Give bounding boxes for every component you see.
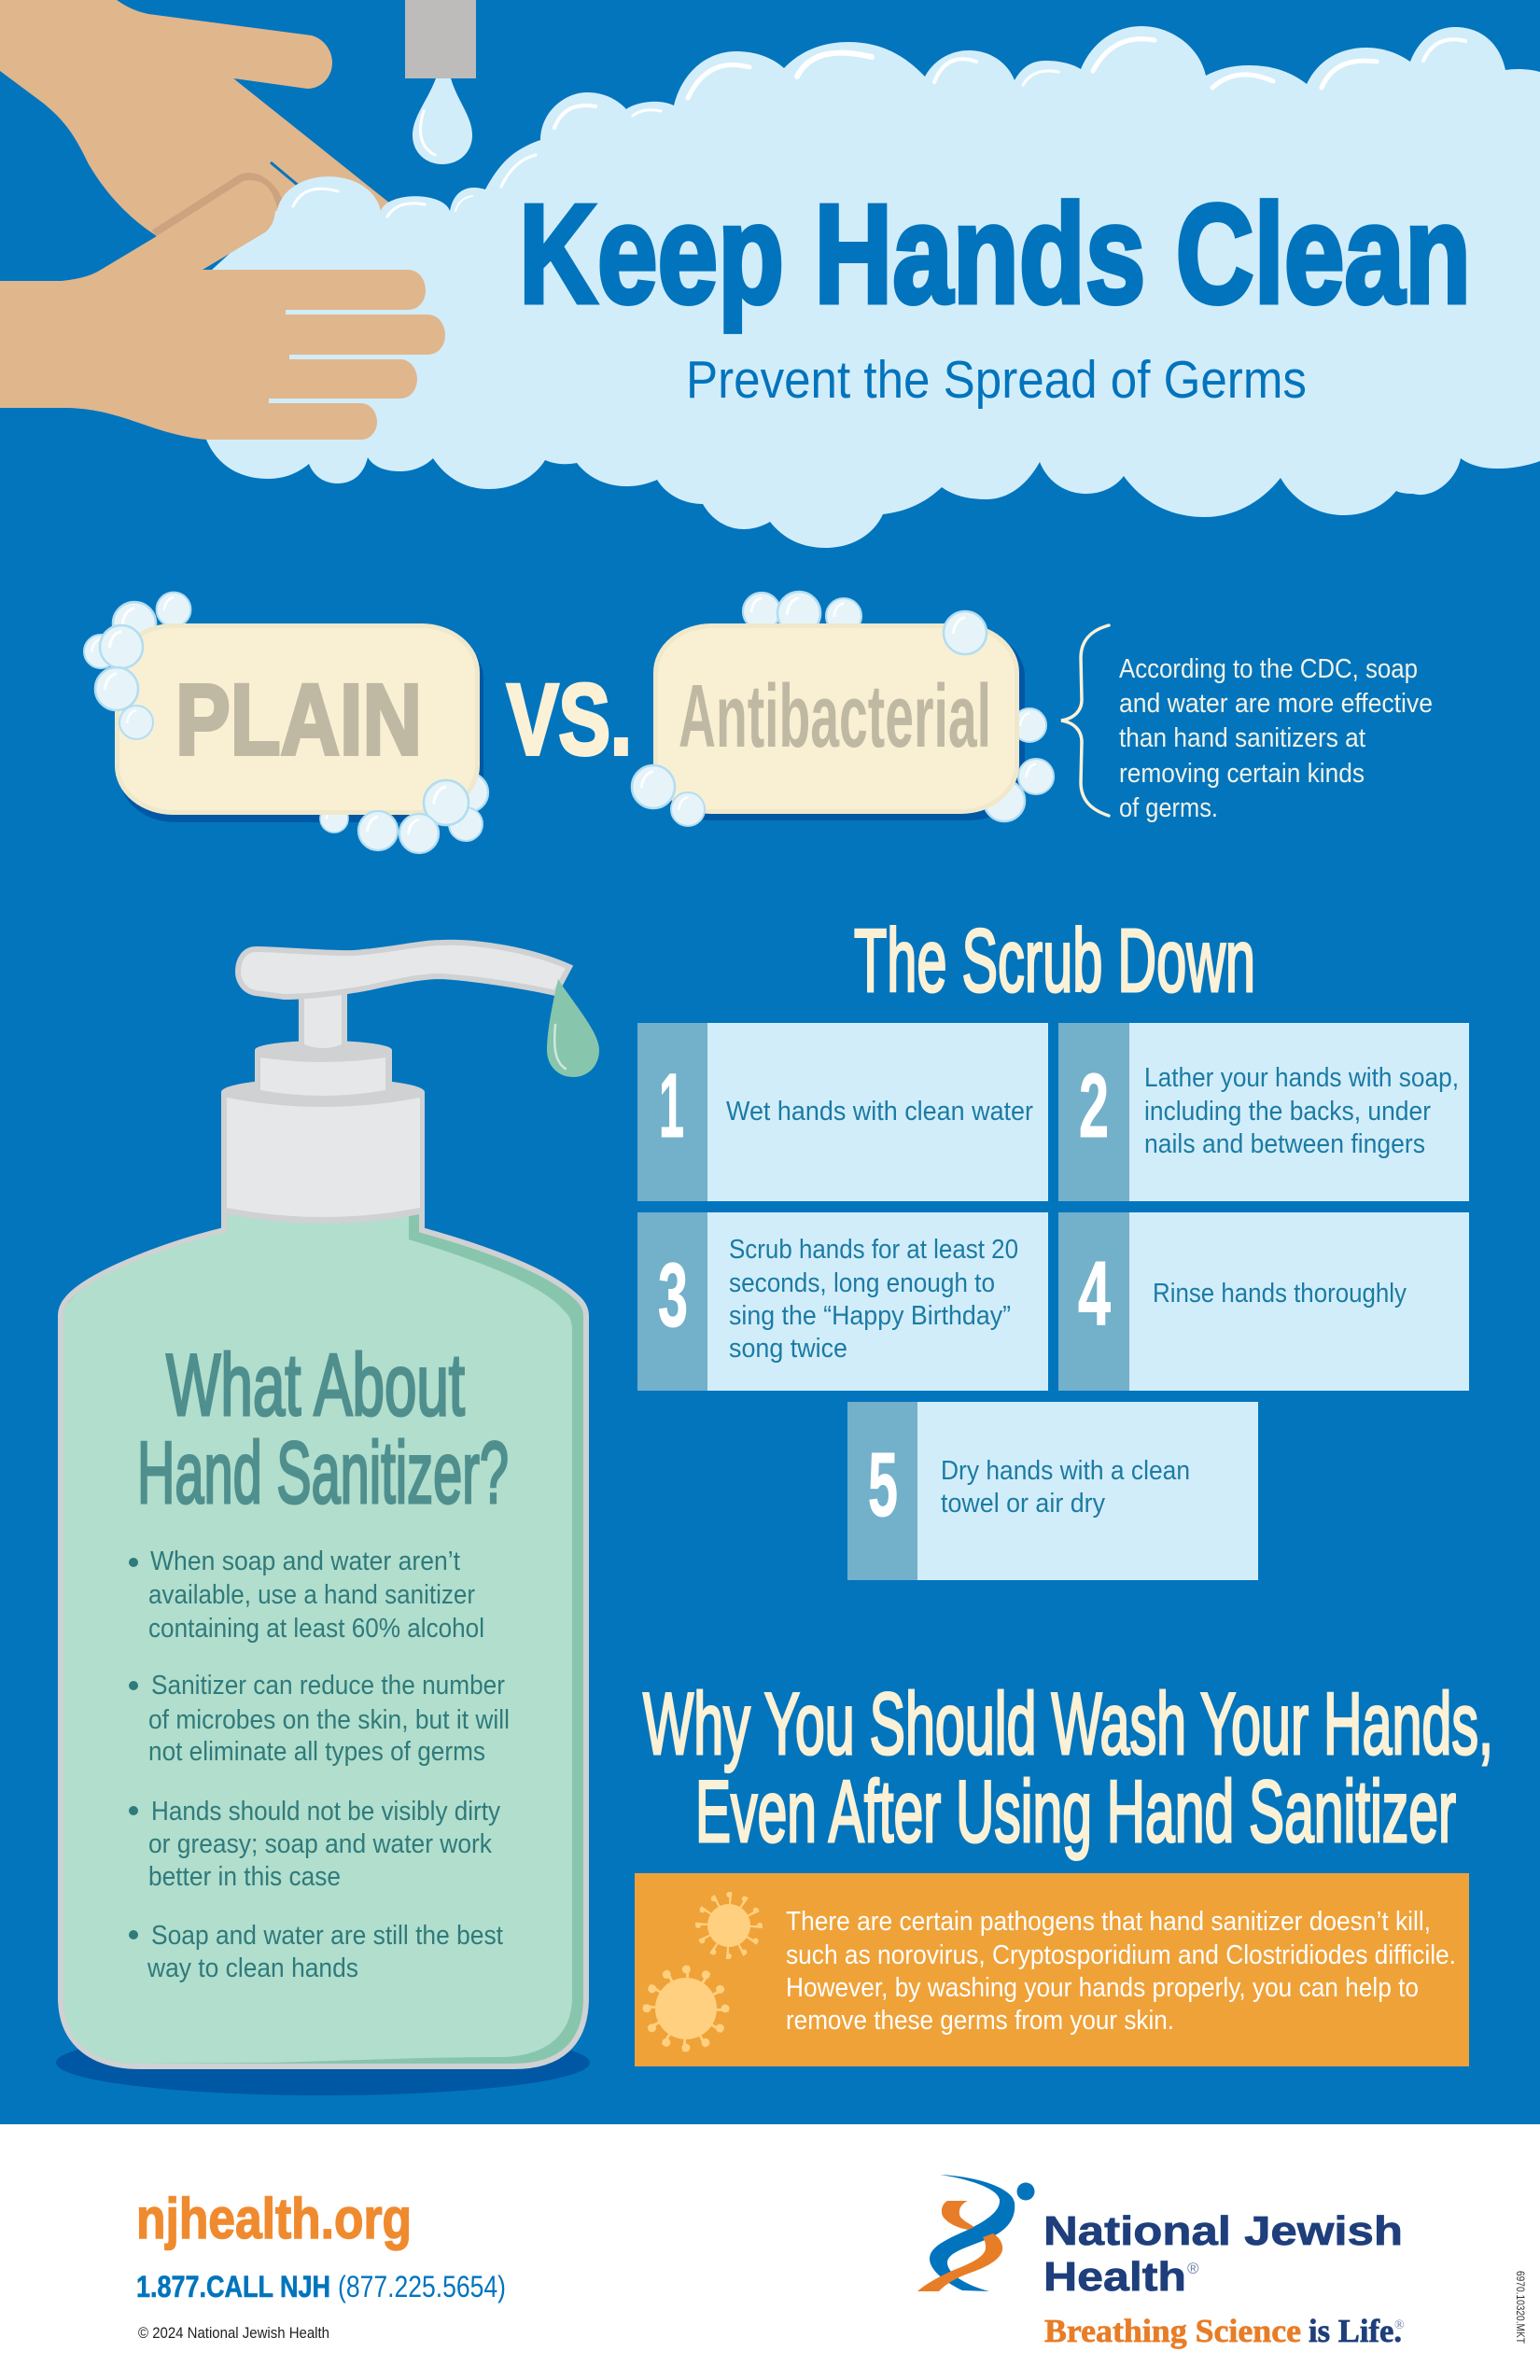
step 2 <box>1058 1023 1469 1201</box>
footer phone <box>136 2270 506 2303</box>
step 4 <box>1058 1212 1469 1391</box>
text block: CDC note: and water are more effective <box>1119 689 1433 719</box>
soap foam cloud <box>201 26 1540 548</box>
logo tagline: Breathing Science <box>1044 2313 1301 2349</box>
step 2: 2 <box>1079 1055 1109 1156</box>
heading: why wash <box>643 1674 1493 1860</box>
icon: water drop <box>413 78 472 164</box>
logo tagline: is Life. <box>1309 2313 1402 2349</box>
step 3: song twice <box>729 1334 847 1364</box>
text block: CDC note: According to the CDC, soap <box>1119 654 1418 684</box>
text block: sanitizer bullets: or greasy; soap and water work <box>148 1829 492 1859</box>
text block: sanitizer bullets: containing at least 60% alcohol <box>148 1614 484 1644</box>
step 1: Wet hands with clean water <box>726 1097 1033 1127</box>
step 3: sing the “Happy Birthday” <box>729 1301 1011 1331</box>
step 3: Scrub hands for at least 20 <box>729 1235 1018 1265</box>
brace <box>1061 625 1109 816</box>
footer website: njhealth.org <box>136 2187 412 2250</box>
print code: 6970.10320.MKT <box>1514 2271 1527 2345</box>
bottle shadow <box>56 2030 590 2095</box>
step 3 <box>637 1212 1048 1391</box>
text block: sanitizer bullets: available, use a hand sanitizer <box>148 1580 475 1610</box>
footer copyright: © 2024 National Jewish Health <box>138 2324 329 2342</box>
sanitizer bottle <box>61 943 586 2066</box>
logo wordmark <box>1043 2208 1403 2300</box>
callout text: There are certain pathogens that hand sanitizer doesn’t kill, <box>786 1907 1431 1937</box>
step 2: nails and between fingers <box>1144 1129 1425 1159</box>
step 2: Lather your hands with soap, <box>1144 1063 1459 1093</box>
step 5: 5 <box>868 1434 898 1535</box>
heading: hand sanitizer: What About <box>166 1336 465 1434</box>
logo tagline <box>1044 2313 1405 2349</box>
text block: sanitizer bullets: of microbes on the skin, but it will <box>148 1705 510 1735</box>
text block: CDC note: than hand sanitizers at <box>1119 723 1365 753</box>
logo wordmark: Health <box>1043 2254 1186 2300</box>
text block: sanitizer bullets: not eliminate all types of germs <box>148 1737 485 1767</box>
soap label: plain: PLAIN <box>175 663 422 776</box>
text block: sanitizer bullets: Hands should not be visibly dirty <box>151 1797 500 1827</box>
text block: sanitizer bullets: way to clean hands <box>147 1953 358 1983</box>
step 1 <box>637 1023 1048 1201</box>
text block: sanitizer bullets: Sanitizer can reduce the number <box>151 1671 505 1701</box>
logo mark <box>917 2175 1034 2291</box>
logo wordmark: ® <box>1187 2260 1199 2277</box>
sanitizer drop <box>547 979 599 1077</box>
footer phone: (877.225.5654) <box>338 2270 506 2303</box>
callout text: remove these germs from your skin. <box>786 2006 1174 2036</box>
icon: faucet <box>405 0 476 78</box>
heading: hand sanitizer <box>137 1336 509 1521</box>
text block: sanitizer bullets <box>129 1547 510 1983</box>
text block: sanitizer bullets: better in this case <box>148 1862 341 1892</box>
logo tagline: ® <box>1394 2318 1405 2332</box>
text block: sanitizer bullets: When soap and water aren’t <box>150 1547 460 1576</box>
soap bar: plain <box>84 593 488 853</box>
logo wordmark: National Jewish <box>1043 2208 1403 2254</box>
text block: CDC note <box>1119 654 1433 823</box>
illustration: upper hand <box>0 0 401 280</box>
text block: CDC note: removing certain kinds <box>1119 759 1365 789</box>
callout text: However, by washing your hands properly, you can help to <box>786 1973 1419 2003</box>
step 3: 3 <box>658 1244 688 1346</box>
step 1: 1 <box>659 1055 684 1156</box>
heading: hand sanitizer: Hand Sanitizer? <box>137 1423 509 1521</box>
step 5: towel or air dry <box>941 1489 1105 1519</box>
subtitle: Prevent the Spread of Germs <box>686 350 1307 410</box>
callout text: such as norovirus, Cryptosporidium and Clostridiodes difficile. <box>786 1940 1456 1970</box>
step 5: Dry hands with a clean <box>941 1456 1190 1486</box>
illustration: lower hand <box>0 180 445 440</box>
step 4: 4 <box>1078 1242 1111 1344</box>
icon: large germ <box>647 1969 725 2048</box>
step 3: seconds, long enough to <box>729 1268 995 1298</box>
text block: CDC note: of germs. <box>1119 793 1218 823</box>
step 5 <box>847 1402 1258 1580</box>
logo: National Jewish Health <box>917 2175 1405 2349</box>
footer phone: 1.877.CALL NJH <box>136 2270 330 2303</box>
text block: sanitizer bullets: Soap and water are still the best <box>151 1921 503 1951</box>
soap label: antibacterial: Antibacterial <box>679 666 991 766</box>
heading: the scrub down: The Scrub Down <box>854 911 1255 1011</box>
callout text <box>786 1907 1456 2036</box>
callout: pathogens <box>635 1873 1469 2066</box>
icon: small germ <box>698 1895 760 1956</box>
step 2: including the backs, under <box>1144 1097 1431 1127</box>
versus label: VS. <box>507 663 632 776</box>
step 4: Rinse hands thoroughly <box>1153 1279 1407 1309</box>
soap bar: antibacterial <box>632 592 1054 826</box>
